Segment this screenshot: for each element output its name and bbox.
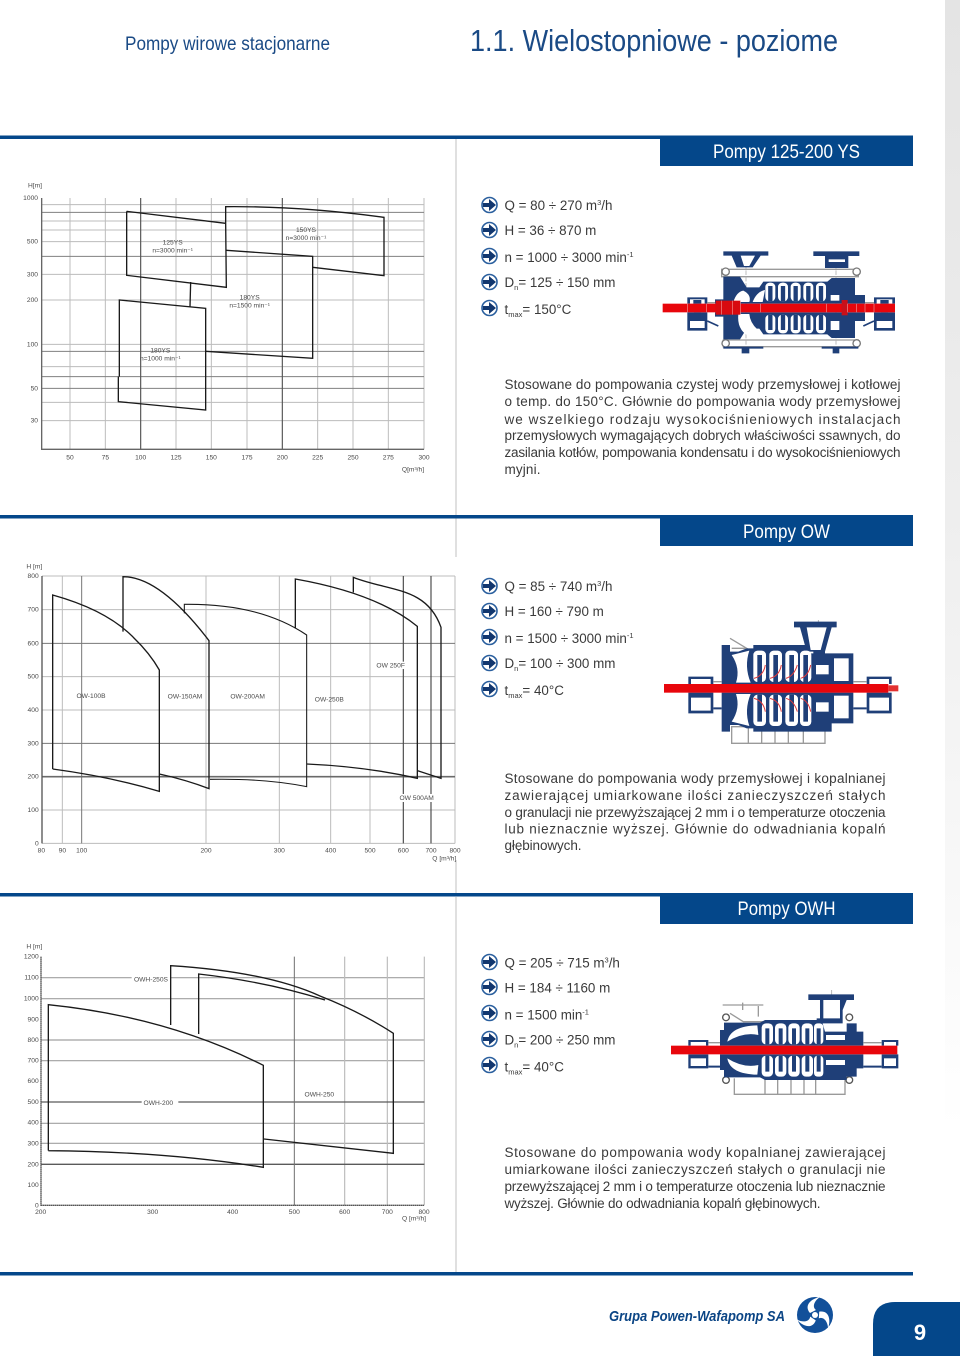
chart: YS performance field: 100 — [27, 341, 38, 348]
chart: OW performance field: 700 — [28, 607, 39, 614]
chart: OWH performance field: OWH-250 — [305, 1091, 334, 1098]
chart: YS performance field: 30 — [31, 418, 38, 425]
specification list: max — [508, 691, 523, 700]
chart: YS performance field: H[m] — [28, 183, 42, 190]
chart: OW performance field: 100 — [28, 807, 39, 814]
specification list: = 125 ÷ 150 mm — [518, 275, 615, 290]
description text: głębinowych. — [504, 838, 582, 853]
chart: YS performance field: 250 — [347, 454, 359, 461]
header bar — [0, 136, 913, 166]
chart: YS performance field: 275 — [383, 454, 394, 461]
chart: OW performance field: 800 — [449, 848, 461, 855]
chart: OWH performance field: OWH-250S — [134, 976, 169, 983]
chart: YS performance field: 300 — [418, 454, 430, 461]
description text — [504, 771, 886, 853]
description text: przemysłowych wymagających dobrych właściwości ssawnych, do — [504, 428, 900, 443]
chart: YS performance field: 175 — [241, 454, 253, 461]
chart: OW performance field: 400 — [325, 848, 337, 855]
chart: YS performance field: 180YS — [240, 294, 260, 301]
company name: Grupa Powen-Wafapomp SA — [609, 1308, 785, 1325]
pump cross-section: YS — [663, 251, 895, 353]
chart: YS performance field: 75 — [102, 454, 109, 461]
chart: YS performance field: n=1500 min⁻¹ — [229, 302, 271, 309]
specification list: H = 36 ÷ 870 m — [504, 223, 596, 238]
chart: OW performance field: OW-100B — [76, 693, 106, 700]
specification list: H = 160 ÷ 790 m — [504, 604, 604, 619]
header bar: Pompy 125-200 YS — [713, 142, 860, 163]
page number tab: 9 — [914, 1320, 926, 1345]
chart: OWH performance field: 700 — [28, 1058, 39, 1065]
specification list: 3 — [605, 956, 609, 964]
chart: OWH performance field: 200 — [35, 1209, 47, 1216]
specification list: /h — [601, 198, 612, 213]
chart: YS performance field: 150 — [206, 454, 217, 461]
specification list: t — [504, 302, 508, 317]
chart: YS performance field: 50 — [66, 454, 74, 461]
specification list: D — [504, 656, 514, 671]
chart: OWH performance field: 600 — [28, 1078, 39, 1085]
description text: zawierającej umiarkowane ilości zanieczyszczeń stałych — [504, 788, 886, 803]
specification list: = 200 ÷ 250 mm — [518, 1032, 615, 1048]
chart: YS performance field: 500 — [27, 239, 38, 246]
chart: YS performance field — [23, 183, 430, 474]
specification list: n = 1500 ÷ 3000 min — [504, 631, 627, 646]
chart: OW performance field: 80 — [38, 848, 45, 855]
description text: myjni. — [504, 462, 540, 477]
chart: OWH performance field: 0 — [35, 1202, 39, 1209]
section label: Pompy wirowe stacjonarne: Pompy wirowe stacjonarne — [125, 33, 330, 55]
chart: OWH performance field: 1100 — [24, 975, 39, 982]
specification list — [482, 198, 634, 319]
specification list: 3 — [597, 579, 601, 588]
specification list: max — [508, 1068, 523, 1076]
bullet icons — [482, 198, 497, 316]
chart: OWH performance field: 900 — [28, 1016, 39, 1023]
chart: OWH performance field: 100 — [28, 1182, 39, 1189]
page number tab — [873, 1302, 960, 1356]
specification list — [482, 954, 620, 1076]
description text: wyższej. Głównie do odwadniania kopalń głębinowych. — [504, 1196, 820, 1211]
chart: OWH performance field: 500 — [28, 1099, 39, 1106]
chart: YS performance field: 125YS — [163, 240, 183, 247]
chart: YS performance field: 225 — [312, 454, 324, 461]
chart: YS performance field: n=3000 min⁻¹ — [286, 235, 327, 242]
chart: OW performance field: 300 — [274, 848, 285, 855]
header bar: Pompy OW — [743, 522, 830, 543]
chart: OWH performance field: 700 — [382, 1209, 393, 1216]
chart: OW performance field — [26, 564, 461, 863]
panel: Pompy 125-200 YS — [0, 136, 913, 477]
chart: YS performance field: 125 — [170, 454, 182, 461]
specification list: D — [504, 1032, 514, 1048]
chart: OW performance field: 300 — [28, 740, 39, 747]
specification list: -1 — [582, 1008, 589, 1016]
specification list: t — [504, 683, 508, 698]
chart: YS performance field: 200 — [277, 454, 288, 461]
chart: OW performance field: OW 500AM — [399, 795, 434, 802]
title: 1.1. Wielostopniowe - poziome — [470, 23, 838, 58]
specification list: -1 — [627, 631, 634, 640]
chart: OWH performance field: 500 — [289, 1209, 300, 1216]
specification list: = 40°C — [522, 1060, 564, 1074]
chart: YS performance field: n=1000 min⁻¹ — [140, 355, 181, 362]
specification list: t — [504, 1060, 508, 1074]
chart: OWH performance field: Q [m³/h] — [402, 1216, 426, 1223]
specification list: Q = 85 ÷ 740 m — [504, 579, 597, 594]
chart: OW performance field: OW-200AM — [230, 694, 265, 701]
chart: YS performance field: n=3000 min⁻¹ — [152, 248, 194, 255]
description text: umiarkowane ilości zanieczyszczeń stałych o granulacji nie — [504, 1162, 886, 1177]
chart: OW performance field: 100 — [76, 848, 88, 855]
chart: OW performance field: 800 — [28, 573, 39, 580]
description text — [504, 1145, 886, 1211]
description text: zasilania kotłów, pompowania kondensatu i do wysokociśnieniowych — [504, 445, 900, 460]
bullet icons — [482, 954, 497, 1072]
chart: YS performance field: 180YS — [150, 347, 171, 354]
chart: OWH performance field: 400 — [227, 1209, 239, 1216]
chart: OWH performance field: 1200 — [24, 954, 39, 961]
specification list: = 150°C — [522, 302, 572, 317]
specification list: n — [514, 283, 518, 292]
panel: Pompy OW — [0, 515, 913, 863]
description text: o granulacji nie przewyższającej 2 mm i o temperaturze otoczenia — [504, 805, 886, 820]
description text: Stosowane do pompowania wody przemysłowej i kopalnianej — [504, 771, 886, 786]
chart: OW performance field: 400 — [28, 707, 39, 714]
chart: OW performance field: 500 — [364, 848, 376, 855]
specification list: Q = 80 ÷ 270 m — [504, 198, 597, 213]
chart: OWH performance field: 400 — [28, 1120, 39, 1127]
specification list: n — [514, 1040, 518, 1050]
chart: YS performance field: 100 — [135, 454, 147, 461]
chart: YS performance field: Q[m³/h] — [402, 467, 424, 474]
description text: Stosowane do pompowania czystej wody przemysłowej i kotłowej — [504, 377, 900, 392]
specification list — [482, 578, 634, 700]
chart: OWH performance field: H [m] — [26, 944, 42, 951]
chart: YS performance field: 1000 — [23, 195, 38, 202]
chart: OWH performance field: 300 — [28, 1140, 39, 1147]
pump cross-section: OWH — [671, 990, 898, 1094]
specification list: 3 — [597, 198, 601, 207]
chart: OW performance field: OW 250F — [376, 662, 405, 669]
specification list: /h — [609, 956, 620, 970]
chart: OW performance field: 90 — [59, 848, 66, 855]
chart: OW performance field: 700 — [425, 848, 437, 855]
description text: Stosowane do pompowania wody kopalnianej zawierającej — [504, 1145, 886, 1160]
panel: Pompy OWH — [0, 893, 913, 1223]
specification list: D — [504, 275, 514, 290]
specification list: max — [508, 310, 523, 319]
header bar: Pompy OWH — [738, 899, 836, 920]
specification list: n — [514, 664, 518, 673]
specification list: n = 1000 ÷ 3000 min — [504, 250, 627, 265]
chart: YS performance field: 50 — [31, 385, 38, 392]
chart: OW performance field: 200 — [200, 848, 212, 855]
chart: OW performance field: OW-150AM — [168, 694, 202, 701]
icon: company logo swirl — [797, 1297, 834, 1333]
chart: OW performance field: 200 — [28, 774, 39, 781]
chart: OW performance field: 600 — [398, 848, 409, 855]
specification list: Q = 205 ÷ 715 m — [504, 956, 605, 970]
chart: OWH performance field: 800 — [28, 1037, 39, 1044]
chart: OW performance field: 0 — [35, 840, 39, 847]
chart: YS performance field: 300 — [27, 271, 38, 278]
bullet icons — [482, 578, 497, 696]
chart: OW performance field: 600 — [28, 640, 39, 647]
description text: we wszelkiego rodzaju wysokociśnieniowych instalacjach — [504, 412, 900, 427]
chart: OW performance field: OW-250B — [315, 696, 344, 703]
chart: OW performance field: 500 — [28, 674, 39, 681]
specification list: H = 184 ÷ 1160 m — [504, 980, 610, 996]
header bar — [0, 515, 913, 546]
header bar — [0, 893, 913, 924]
description text: lub nieznacznie wyższej. Głównie do odwadniania kopalń — [504, 822, 886, 836]
chart: OW performance field: H [m] — [26, 564, 42, 571]
chart: OWH performance field: 200 — [28, 1161, 39, 1168]
chart: YS performance field: 200 — [27, 297, 38, 304]
footer rule — [0, 1272, 913, 1276]
specification list: -1 — [627, 250, 634, 259]
chart: YS performance field: 150YS — [296, 227, 317, 234]
description text — [504, 377, 900, 477]
chart: OWH performance field: 800 — [418, 1209, 430, 1216]
description text: o temp. do 150°C. Głównie do pompowania wody przemysłowej — [504, 394, 900, 409]
chart: OWH performance field: 600 — [339, 1209, 351, 1216]
chart: OWH performance field: 1000 — [24, 996, 39, 1003]
chart: OWH performance field: 300 — [147, 1209, 159, 1216]
specification list: n = 1500 min — [504, 1008, 582, 1022]
specification list: = 40°C — [522, 683, 564, 698]
description text: przewyższającej 2 mm i o temperaturze otoczenia lub nieznacznie — [504, 1179, 886, 1194]
chart: OWH performance field: OWH-200 — [144, 1100, 173, 1107]
specification list: = 100 ÷ 300 mm — [518, 656, 615, 671]
pump cross-section: OW — [664, 620, 898, 743]
chart: OWH performance field — [24, 944, 430, 1223]
chart: OW performance field: Q [m³/h] — [432, 856, 456, 863]
specification list: /h — [601, 579, 612, 594]
